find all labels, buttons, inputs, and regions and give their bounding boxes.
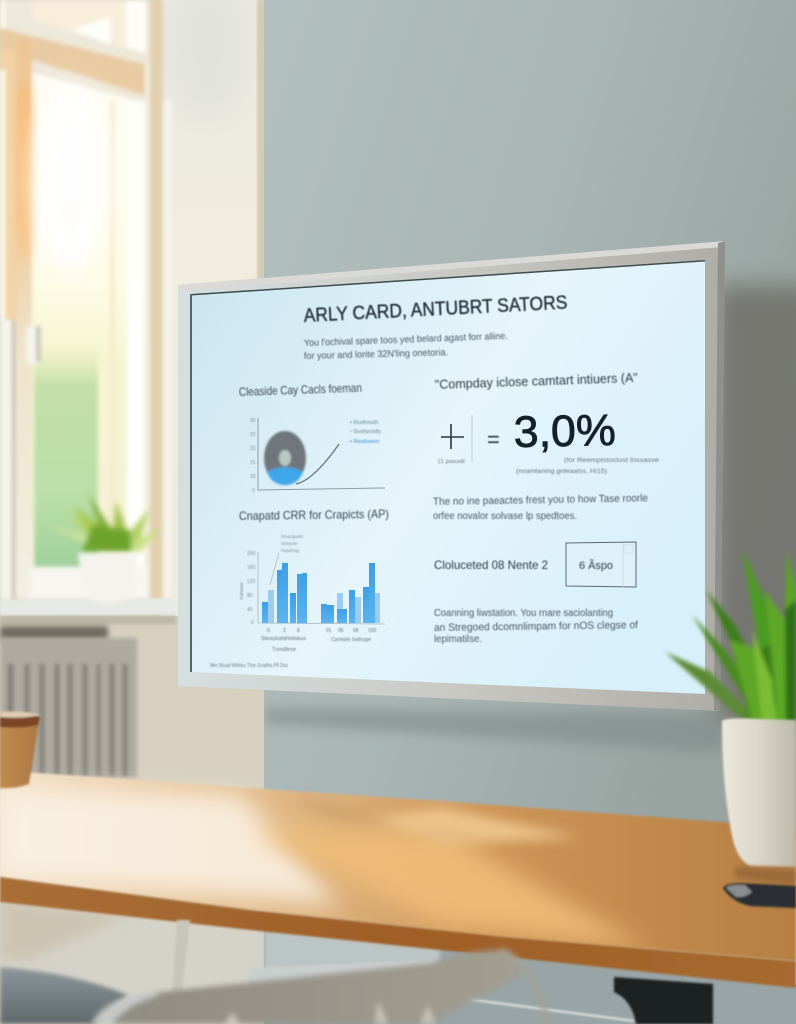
potted plant bbox=[665, 547, 796, 885]
big number: 3,0% bbox=[513, 406, 616, 457]
annotation: Reactpath bbox=[281, 534, 303, 540]
y axis label: Turnover bbox=[239, 582, 244, 600]
plant on the sill bbox=[48, 494, 165, 603]
chart: grouped bars: 120 bbox=[247, 579, 256, 585]
formula: equals sign: = bbox=[487, 427, 500, 452]
axis captions: 100 bbox=[368, 628, 377, 634]
chair seat bbox=[0, 967, 128, 1024]
phone on table bbox=[723, 883, 796, 908]
lower wall and radiator bbox=[0, 616, 264, 792]
monitor frame bbox=[178, 241, 725, 711]
big number caption: (for Reemptstoclust Inssasve bbox=[564, 458, 660, 464]
legend: ▪ Rusfoosth bbox=[350, 420, 378, 426]
paragraph two: Coanning liwstation. You rnare saciolanting bbox=[434, 607, 613, 619]
chart: line and portrait: 15 bbox=[250, 460, 256, 466]
below table background bbox=[0, 900, 796, 1024]
title: ARLY CARD, ANTUBRT SATORS bbox=[303, 292, 568, 327]
top pane bbox=[33, 0, 146, 53]
value box bbox=[566, 542, 636, 587]
legend: ▫ Sushycistly bbox=[350, 429, 381, 435]
label: calculated: Cloluceted 08 Nente 2 bbox=[434, 558, 548, 572]
windowsill bbox=[0, 598, 176, 617]
chart: grouped bars bbox=[239, 534, 385, 653]
paragraph two: an Stregoed dcomnlimpam for nOS clegse of bbox=[434, 619, 638, 634]
table surface bbox=[0, 772, 796, 988]
chart: line and portrait: 20 bbox=[250, 446, 256, 452]
chart: grouped bars: 160 bbox=[247, 565, 256, 571]
crossbar bbox=[0, 28, 160, 100]
table legs bbox=[172, 920, 713, 1024]
chart: grouped bars: 200 bbox=[247, 551, 256, 557]
heading: right column: "Compday iclose camtart intiuers (A" bbox=[435, 371, 638, 392]
legend bbox=[350, 420, 381, 445]
axis captions bbox=[261, 628, 377, 653]
monitor screen bbox=[191, 260, 705, 694]
chair back bbox=[91, 950, 548, 1024]
big number caption bbox=[516, 458, 660, 475]
paragraph one: orfee novalor solvase lp spedtoes. bbox=[433, 510, 577, 522]
chart: grouped bars: 0 bbox=[251, 620, 254, 626]
axis captions: 06 bbox=[338, 628, 344, 634]
axis captions: 2 bbox=[283, 628, 286, 634]
axis captions: 8 bbox=[297, 628, 300, 634]
monitor bbox=[178, 241, 725, 711]
big number caption: (noamlanlng gnleaatss. H/15) bbox=[516, 469, 607, 475]
chart: line and portrait: 0 bbox=[252, 488, 255, 494]
coffee cup bbox=[0, 711, 41, 788]
leaves bbox=[665, 547, 796, 722]
annotation bbox=[281, 534, 303, 554]
chart: line and portrait bbox=[250, 418, 385, 494]
axis captions: 0 bbox=[267, 628, 270, 634]
axis captions: Steaskatahlstakus bbox=[261, 636, 307, 642]
footer note: Mer Stuad Whitou Thar Soatiha Pfl Daz bbox=[210, 663, 288, 669]
paragraph two: lepimatilse. bbox=[434, 633, 482, 645]
heading: bottom left chart: Cnapatd CRR for Crapicts (AP) bbox=[239, 507, 389, 523]
legend: ▪ Reatlowon bbox=[350, 439, 379, 445]
formula: small caption: (1 paxsdi bbox=[438, 459, 465, 465]
chart: line and portrait: 25 bbox=[250, 432, 256, 438]
annotation: Rquiring bbox=[281, 548, 299, 554]
axis captions: Trendilese bbox=[272, 647, 296, 653]
portrait circle bbox=[264, 431, 306, 485]
chart: grouped bars: 80 bbox=[247, 593, 253, 599]
formula: plus sign bbox=[441, 415, 472, 462]
paragraph one bbox=[433, 492, 648, 522]
subtitle: You l'ochival spare toos yed belard agast forr alline. bbox=[304, 331, 508, 349]
chart: line and portrait: 30 bbox=[250, 418, 256, 424]
subtitle: for your and lorite 32N'ling onetoria. bbox=[304, 347, 448, 362]
subtitle bbox=[304, 331, 508, 362]
axis captions: Caneple Isatruge bbox=[331, 637, 371, 643]
pot shadow on table bbox=[735, 866, 796, 885]
window side frames bbox=[16, 40, 32, 600]
paragraph one: The no ine paeactes frest you to how Tase roorle bbox=[433, 492, 648, 508]
value box: 6 Ãspo bbox=[579, 559, 613, 572]
chair bbox=[0, 950, 548, 1024]
heading: top left chart: Cleaside Cay Cacls foeman bbox=[239, 381, 362, 399]
axis captions: 08 bbox=[353, 628, 359, 634]
axis captions: 01 bbox=[326, 628, 332, 634]
sunlight patch bbox=[0, 790, 340, 905]
paragraph two bbox=[434, 607, 638, 645]
chart: line and portrait: 10 bbox=[250, 474, 256, 480]
window handle bbox=[26, 326, 41, 364]
annotation: Setuest bbox=[281, 541, 298, 547]
pot bbox=[722, 718, 796, 867]
window with sunlight bbox=[0, 0, 171, 600]
chart: grouped bars: 40 bbox=[247, 607, 253, 613]
main pane bbox=[32, 73, 145, 567]
